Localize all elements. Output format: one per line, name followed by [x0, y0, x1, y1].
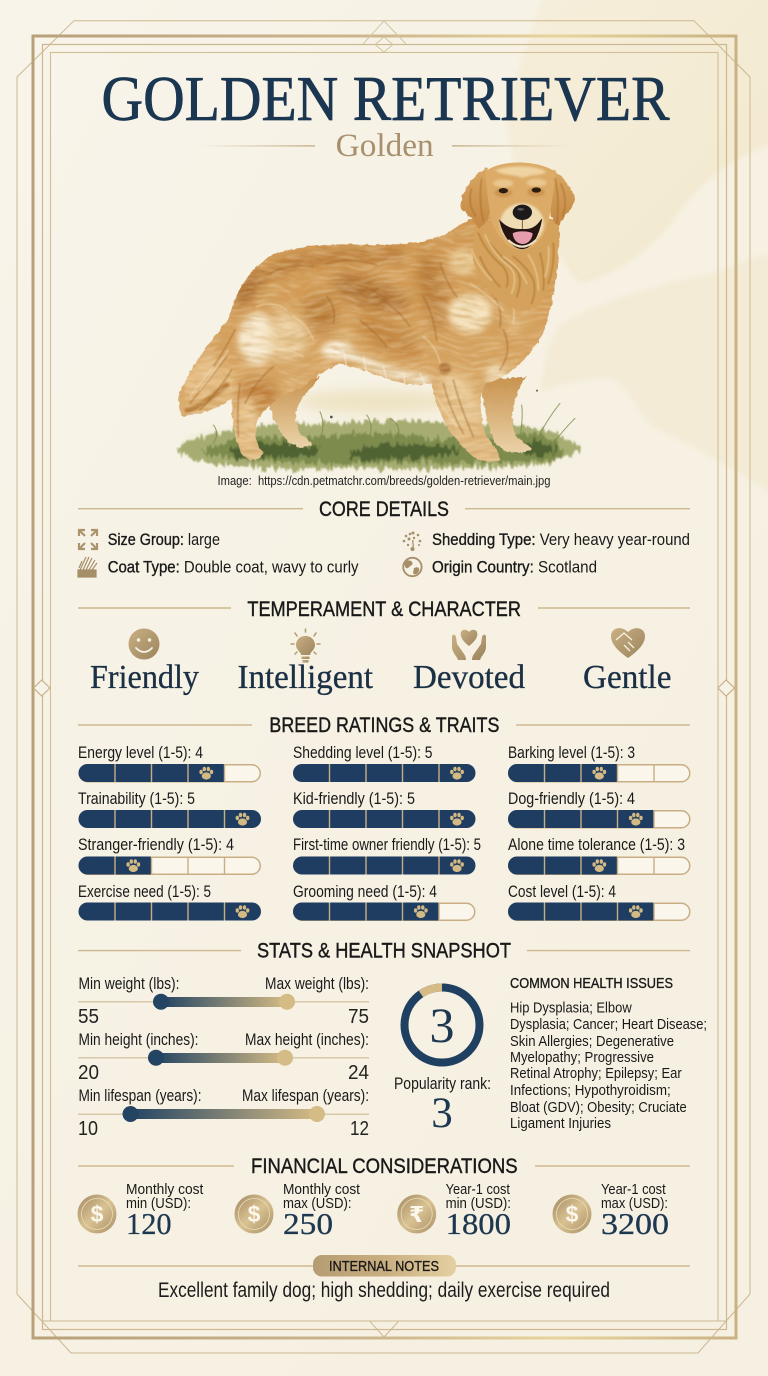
panel: range sliders	[78, 975, 369, 1140]
health list: Skin Allergies; Degenerative	[510, 1033, 674, 1050]
cost: year-1 max: Year-1 cost	[601, 1182, 666, 1198]
icon: shedding	[403, 532, 421, 551]
rating: first-time owner	[293, 836, 481, 874]
health list: Retinal Atrophy; Epilepsy; Ear	[510, 1065, 682, 1082]
cost: monthly max: 250	[283, 1206, 333, 1241]
devoted: Devoted	[413, 659, 525, 696]
rating: alone time	[508, 836, 690, 874]
panel: financial	[78, 1182, 669, 1241]
rating: barking	[508, 744, 690, 782]
image caption: Image: https://cdn.petmatchr.com/breeds/golden-retriever/main.jpg	[218, 473, 550, 488]
rating: kid-friendly: Kid-friendly (1-5): 5	[293, 790, 415, 808]
panel: popularity rank	[394, 988, 491, 1137]
icon: coat	[78, 557, 97, 577]
fur streak texture	[179, 203, 559, 462]
coat type: Coat Type: Double coat, wavy to curly	[108, 559, 359, 577]
mane	[473, 210, 560, 311]
rating: cost	[508, 883, 690, 920]
icon: handshake heart	[611, 628, 645, 658]
slider: lifespan: Min lifespan (years):	[78, 1087, 202, 1105]
cost: year-1 min: 1800	[446, 1206, 511, 1241]
cost: year-1 min	[397, 1182, 511, 1241]
rating: energy	[78, 744, 260, 782]
cost: monthly max: $	[248, 1201, 261, 1227]
friendly: Friendly	[90, 659, 199, 696]
rating: trainability: Trainability (1-5): 5	[78, 790, 195, 808]
eyes	[499, 188, 508, 193]
health list: Bloat (GDV); Obesity; Cruciate	[510, 1099, 687, 1116]
rating: stranger-friendly: Stranger-friendly (1-5): 4	[78, 836, 234, 854]
ring chart	[404, 988, 480, 1062]
health list	[510, 1000, 707, 1132]
slider: lifespan: 12	[350, 1118, 369, 1140]
internal notes text: Excellent family dog; high shedding; daily exercise required	[158, 1279, 610, 1302]
icon: bulb	[291, 629, 320, 662]
illustration: golden retriever	[177, 163, 582, 469]
rating: trainability	[78, 790, 261, 828]
intelligent: Intelligent	[238, 659, 374, 696]
rating: first-time owner: First-time owner friendly (1-5): 5	[293, 836, 481, 854]
rating: grooming: Grooming need (1-5): 4	[293, 883, 437, 901]
cost: monthly min: $	[91, 1201, 104, 1227]
cost: monthly min: 120	[126, 1206, 172, 1241]
cost: monthly min: min (USD):	[126, 1196, 191, 1212]
cost: monthly max	[234, 1182, 360, 1241]
icon: hands and heart	[452, 630, 486, 660]
cost: year-1 min: Year-1 cost	[446, 1182, 510, 1198]
slider: lifespan: Max lifespan (years):	[242, 1087, 369, 1105]
cost: year-1 max	[552, 1182, 669, 1241]
icon: globe	[403, 558, 422, 576]
rating: shedding	[293, 744, 476, 782]
cost: monthly max: max (USD):	[283, 1196, 352, 1212]
fur strands	[190, 260, 514, 437]
slider: weight: 55	[78, 1006, 99, 1028]
grass	[177, 420, 582, 469]
size group: Size Group: large	[108, 531, 220, 549]
slider: height: 20	[78, 1062, 99, 1084]
rating: kid-friendly	[293, 790, 476, 828]
heading: core details: CORE DETAILS	[319, 498, 449, 521]
nose	[513, 205, 532, 220]
panel: breed ratings	[78, 744, 690, 920]
cost: monthly min	[78, 1182, 203, 1241]
popularity label: Popularity rank:	[394, 1075, 491, 1093]
slider: weight: Max weight (lbs):	[265, 975, 369, 993]
cost: monthly min: Monthly cost	[126, 1182, 203, 1198]
health heading: COMMON HEALTH ISSUES	[510, 975, 673, 992]
rating: dog-friendly	[508, 790, 690, 828]
health list: Infections; Hypothyroidism;	[510, 1082, 671, 1099]
heading: financial: FINANCIAL CONSIDERATIONS	[251, 1155, 518, 1178]
health list: Hip Dysplasia; Elbow	[510, 1000, 632, 1016]
icon: smile	[128, 628, 160, 660]
skull and face	[485, 163, 557, 250]
health list: Ligament Injuries	[510, 1115, 611, 1132]
rating: barking: Barking level (1-5): 3	[508, 744, 635, 762]
heading: breed ratings: BREED RATINGS & TRAITS	[269, 714, 499, 737]
panel: temperament	[90, 628, 672, 696]
cost: year-1 min: min (USD):	[446, 1196, 511, 1212]
rating: alone time: Alone time tolerance (1-5): 3	[508, 836, 685, 854]
slider: weight: 75	[348, 1006, 369, 1028]
rank in ring: 3	[430, 997, 454, 1053]
cost: year-1 max: max (USD):	[601, 1196, 668, 1212]
ears	[460, 167, 575, 229]
gentle: Gentle	[583, 659, 672, 696]
panel: common health issues	[510, 975, 707, 1132]
rating: energy: Energy level (1-5): 4	[78, 744, 203, 762]
rating: cost: Cost level (1-5): 4	[508, 883, 616, 901]
head	[460, 163, 575, 311]
heading: stats: STATS & HEALTH SNAPSHOT	[257, 940, 511, 962]
popularity value: 3	[431, 1090, 453, 1137]
rating: exercise	[78, 883, 261, 920]
ground wash	[187, 390, 567, 460]
panel: core details	[78, 530, 690, 577]
cost: year-1 max: $	[566, 1201, 579, 1227]
origin country: Origin Country: Scotland	[432, 559, 597, 577]
badge: internal notes	[78, 1255, 690, 1276]
slider: height: Min height (inches):	[78, 1031, 198, 1049]
cost: year-1 max: 3200	[601, 1206, 669, 1241]
slider: height: 24	[348, 1062, 369, 1084]
title: GOLDEN RETRIEVER	[102, 64, 670, 134]
heading: temperament: TEMPERAMENT & CHARACTER	[247, 598, 521, 621]
subtitle: Golden	[336, 128, 434, 164]
slider: weight	[78, 975, 369, 1028]
health list: Dysplasia; Cancer; Heart Disease;	[510, 1016, 707, 1033]
rating: dog-friendly: Dog-friendly (1-5): 4	[508, 790, 635, 808]
rating: shedding: Shedding level (1-5): 5	[293, 744, 432, 762]
slider: height: Max height (inches):	[245, 1031, 369, 1049]
mouth	[500, 219, 542, 249]
rating: stranger-friendly	[78, 836, 260, 874]
rating: exercise: Exercise need (1-5): 5	[78, 883, 211, 901]
body, tail and near legs	[179, 203, 559, 462]
grass blades	[213, 390, 575, 443]
badge: internal notes: INTERNAL NOTES	[329, 1258, 439, 1275]
rating: grooming	[293, 883, 475, 920]
slider: weight: Min weight (lbs):	[78, 975, 180, 993]
coat colouring	[178, 248, 537, 450]
cost: monthly max: Monthly cost	[283, 1182, 360, 1198]
slider: lifespan: 10	[78, 1118, 98, 1140]
slider: height	[78, 1031, 369, 1084]
shedding type: Shedding Type: Very heavy year-round	[432, 531, 690, 549]
icon: size arrows	[79, 530, 97, 549]
health list: Myelopathy; Progressive	[510, 1049, 654, 1066]
cost: year-1 min: ₹	[409, 1203, 424, 1228]
far legs	[265, 377, 532, 453]
slider: lifespan	[78, 1087, 369, 1140]
